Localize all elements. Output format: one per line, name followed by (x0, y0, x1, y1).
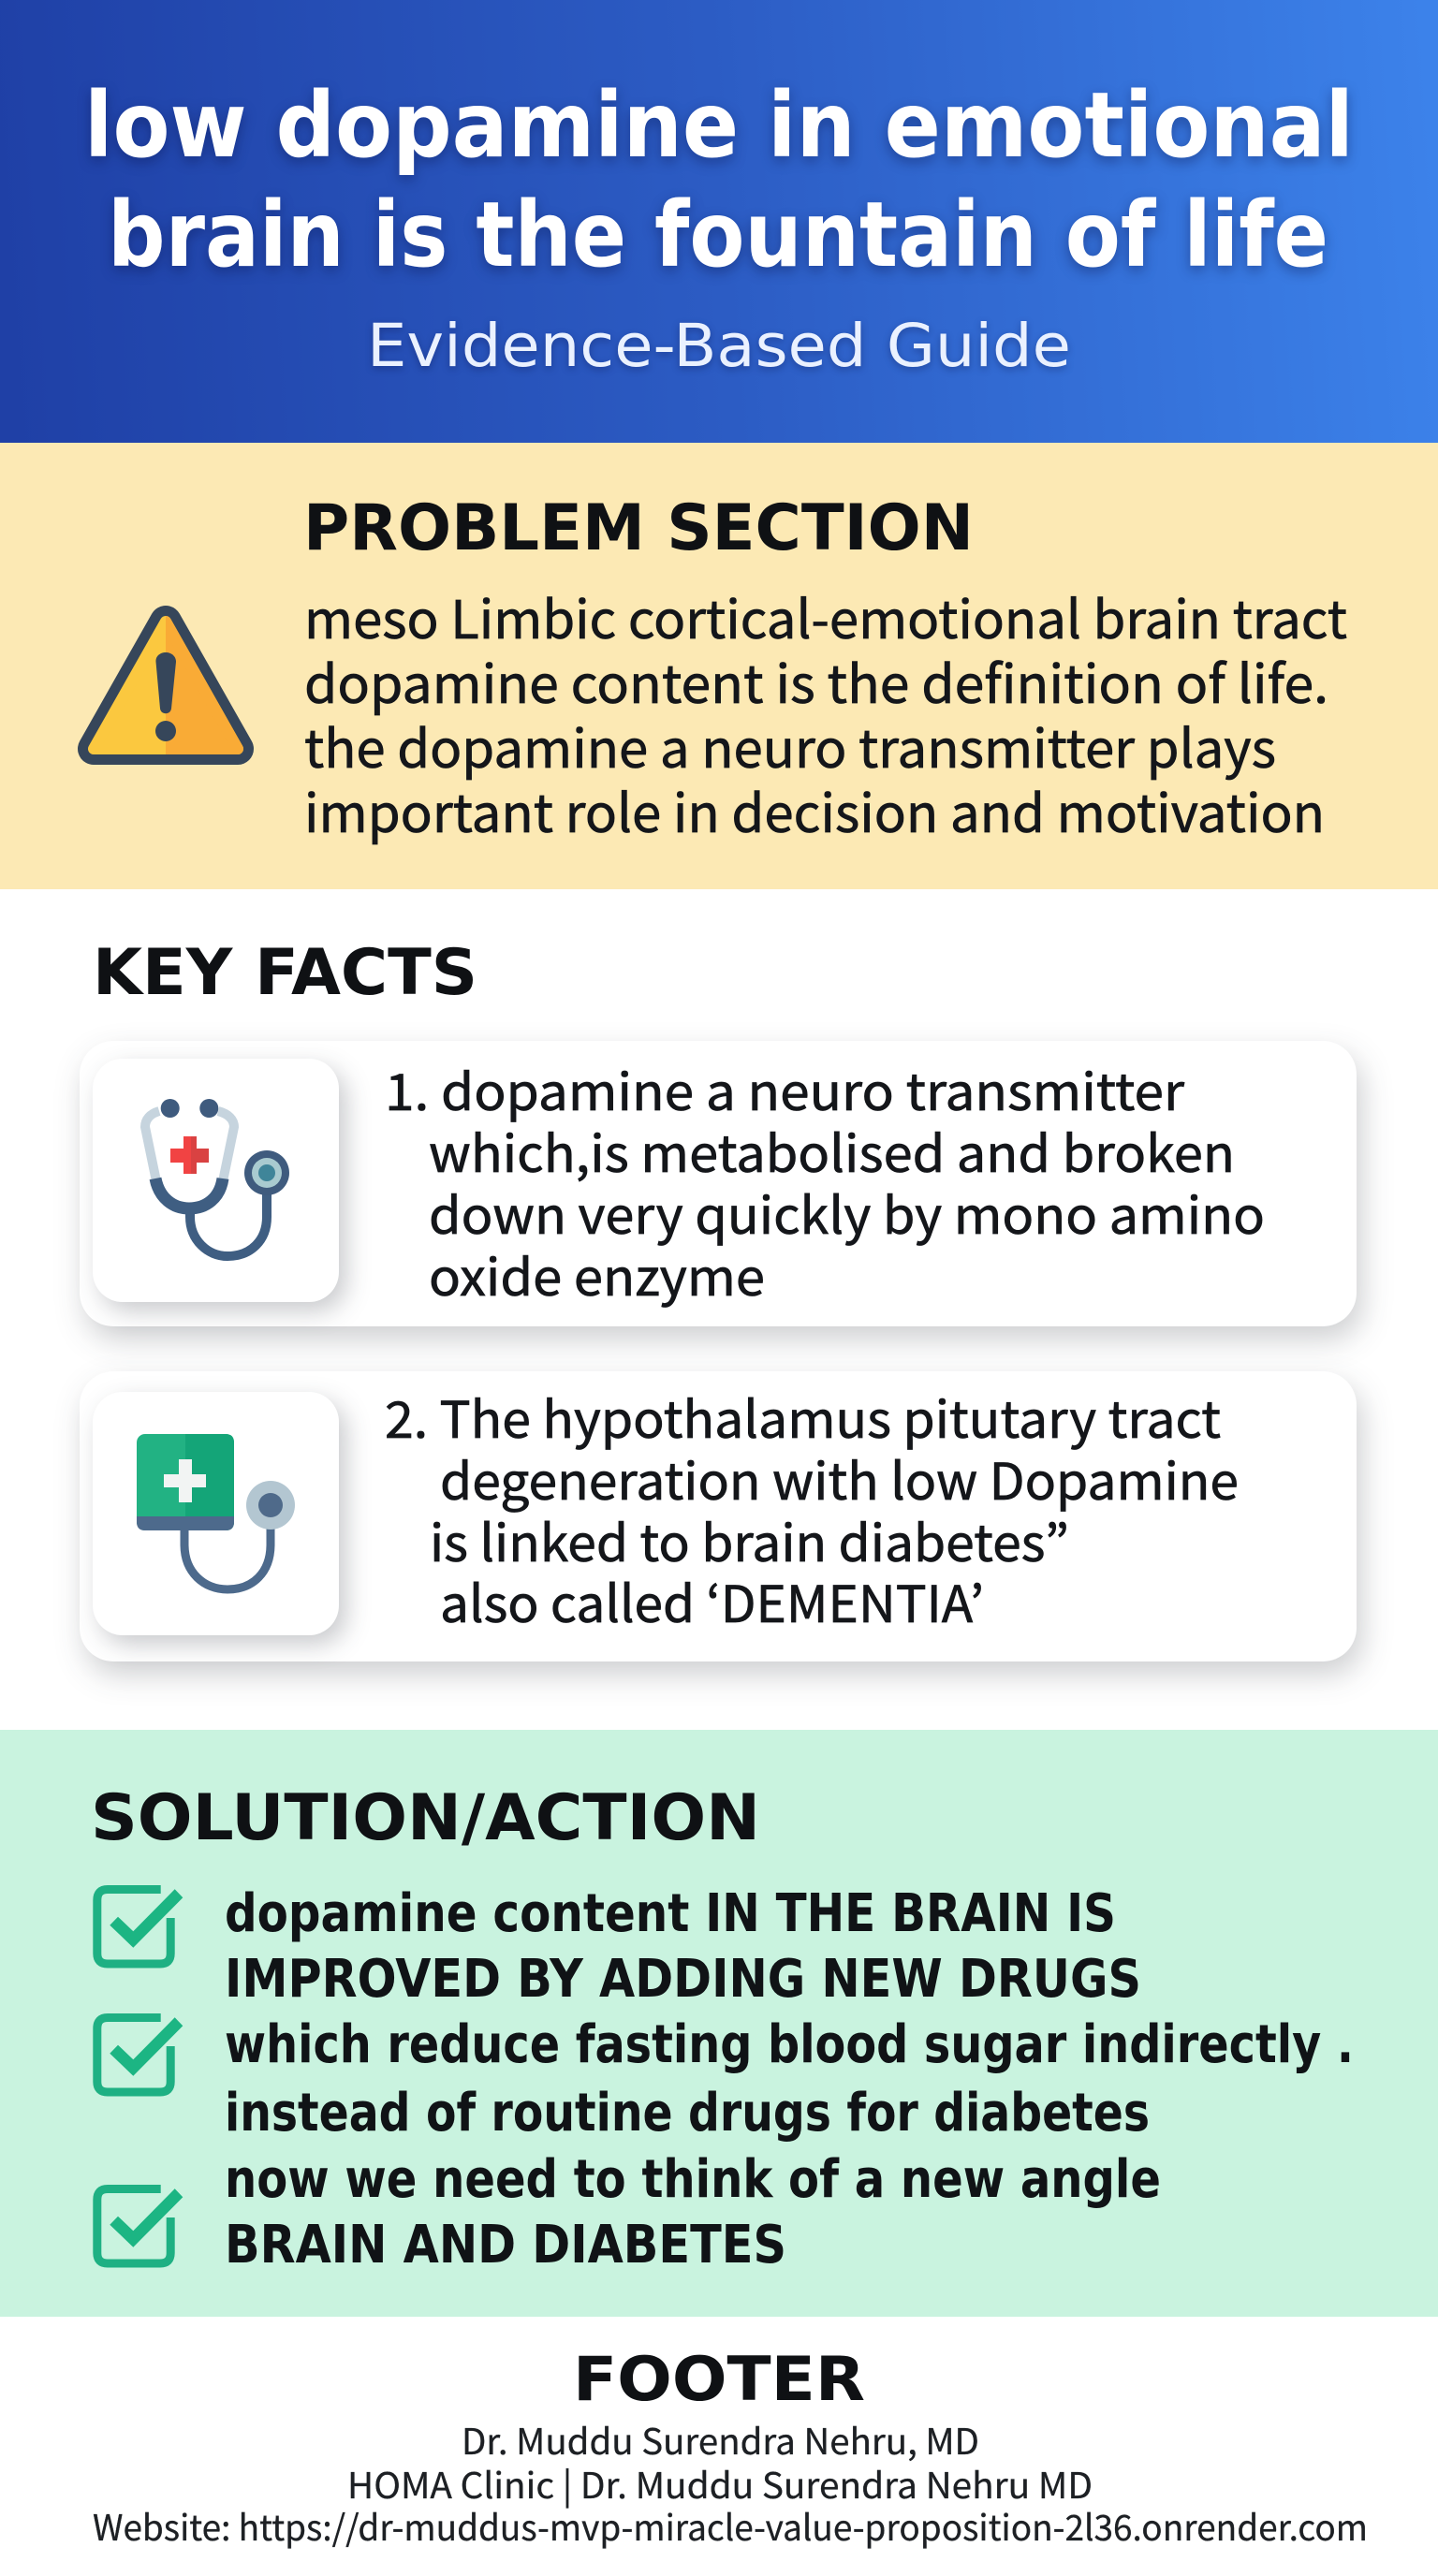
fact 2 text: degeneration with low Dopamine (440, 1441, 1239, 1515)
subtitle: Evidence-Based Guide (367, 312, 1071, 380)
fact 1 text: 1. dopamine a neuro transmitter (385, 1051, 1185, 1125)
footer credits: HOMA Clinic | Dr. Muddu Surendra Nehru MD (347, 2457, 1093, 2509)
title (84, 73, 1354, 287)
solution text: now we need to think of a new angle (225, 2149, 1161, 2210)
problem text: the dopamine a neuro transmitter plays (304, 708, 1276, 783)
icon: warning triangle (94, 622, 238, 749)
icon: checkbox 1 (97, 1889, 183, 1964)
icon: checkbox 3 (97, 2188, 183, 2263)
title: brain is the fountain of life (108, 183, 1328, 287)
panel: solution/action (0, 1730, 1438, 2317)
fact 1 text: oxide enzyme (429, 1237, 765, 1310)
icon: blood pressure cuff (93, 1392, 339, 1635)
panel: header (0, 0, 1438, 443)
footer credits (93, 2413, 1368, 2551)
panel: footer (93, 2345, 1368, 2551)
heading: key facts: KEY FACTS (93, 936, 477, 1010)
problem text: important role in decision and motivation (304, 772, 1325, 848)
fact 2 text: 2. The hypothalamus pitutary tract (385, 1379, 1221, 1453)
fact 2 text (385, 1379, 1239, 1637)
title: low dopamine in emotional (84, 73, 1354, 178)
solution text: instead of routine drugs for diabetes (225, 2083, 1150, 2144)
problem text (304, 578, 1347, 848)
panel: key facts (80, 936, 1357, 1661)
heading: problem section: PROBLEM SECTION (303, 491, 974, 565)
fact 1 text: down very quickly by mono amino (429, 1175, 1265, 1249)
fact 1 text (385, 1051, 1265, 1310)
fact 2 text: also called ‘DEMENTIA’ (440, 1563, 984, 1637)
icon: stethoscope (93, 1059, 339, 1302)
solution text: IMPROVED BY ADDING NEW DRUGS (225, 1949, 1141, 2010)
solution text: BRAIN AND DIABETES (225, 2215, 786, 2276)
problem text: dopamine content is the definition of life. (304, 643, 1328, 719)
icon: checkbox 2 (97, 2017, 183, 2092)
solution text (225, 1883, 1354, 2276)
card: fact 2 (80, 1371, 1357, 1661)
card: fact 1 (80, 1041, 1357, 1326)
footer credits: Dr. Muddu Surendra Nehru, MD (462, 2413, 979, 2465)
problem text: meso Limbic cortical-emotional brain tract (304, 578, 1347, 654)
heading: footer: FOOTER (573, 2345, 865, 2415)
panel: problem section (0, 443, 1438, 889)
solution text: dopamine content IN THE BRAIN IS (225, 1883, 1116, 1944)
heading: solution/action: SOLUTION/ACTION (91, 1781, 760, 1855)
footer credits: Website: https://dr-muddus-mvp-miracle-value-proposition-2l36.onrender.com (93, 2499, 1368, 2551)
fact 1 text: which,is metabolised and broken (429, 1113, 1235, 1187)
fact 2 text: is linked to brain diabetes” (430, 1502, 1069, 1576)
